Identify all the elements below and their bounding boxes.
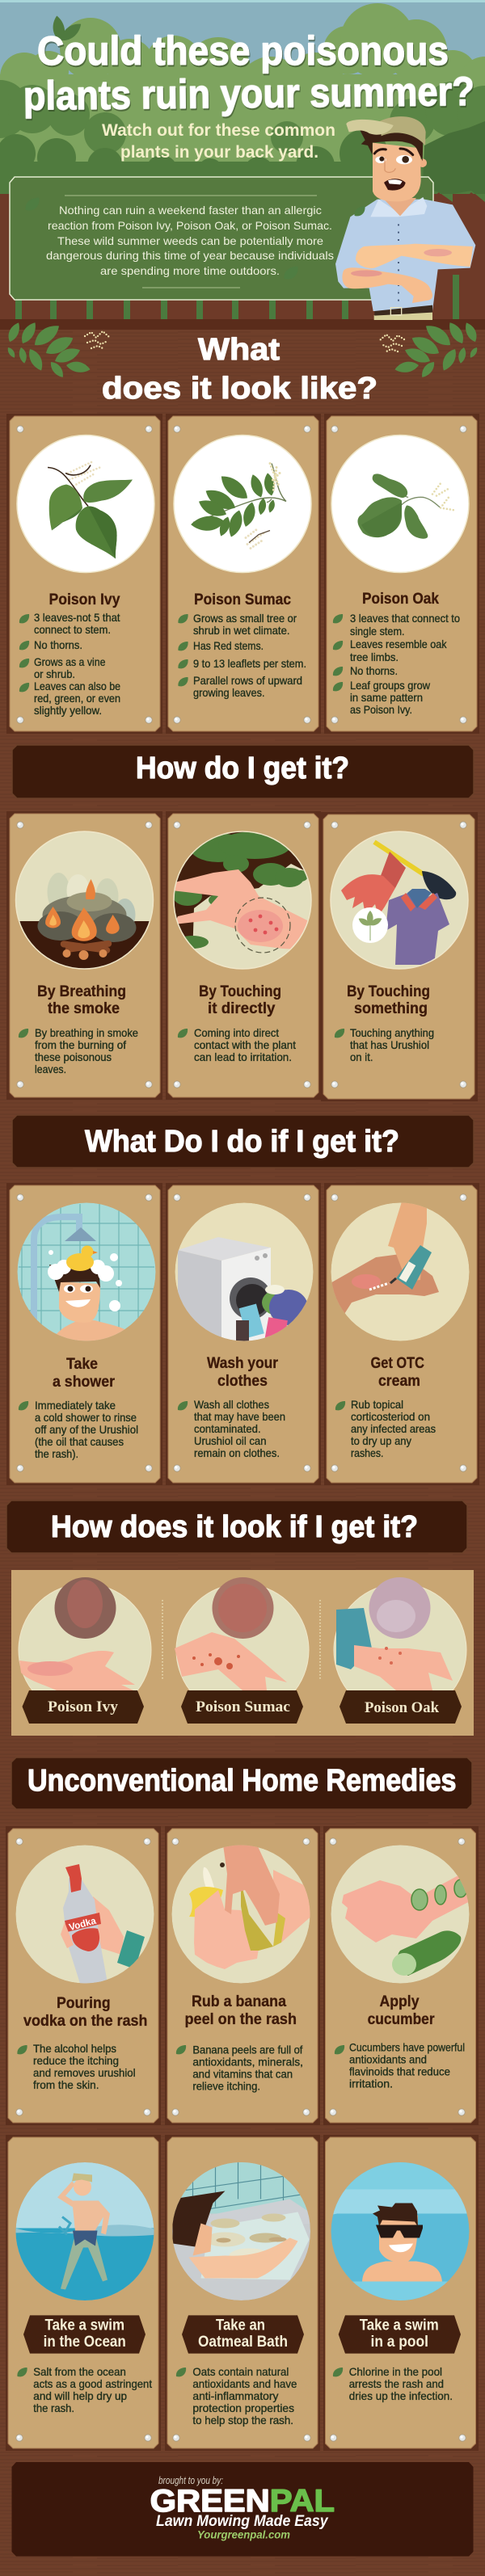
illustration: man in shower — [18, 1202, 155, 1353]
label — [181, 1690, 303, 1724]
icon: left leaf sprig — [6, 320, 109, 380]
bullet list: off any of the Urushiol — [35, 1423, 138, 1436]
bullet list: acts as a good astringent — [33, 2377, 152, 2390]
hero banner scene — [0, 0, 485, 330]
bullet list: connect to stem. — [34, 623, 111, 636]
bullet list: Grows as a vine — [34, 655, 106, 668]
title: something — [354, 1000, 428, 1017]
bullet list: red, green, or even — [34, 692, 120, 705]
icon: leaves at title — [51, 15, 84, 44]
title: Rub a banana — [192, 1993, 286, 2010]
title — [199, 983, 281, 1017]
bullet list: remain on clothes. — [194, 1446, 280, 1459]
label: Take an — [216, 2317, 265, 2334]
bullet list: Parallel rows of upward — [193, 674, 302, 687]
heading: what does it look like: What — [198, 333, 280, 367]
bullet list: these poisonous — [35, 1050, 112, 1063]
bullet list: contaminated. — [194, 1422, 261, 1435]
label: Oatmeal Bath — [198, 2334, 288, 2351]
card: otc cream — [324, 1183, 479, 1485]
title: Wash your — [207, 1355, 279, 1372]
card: take a shower — [6, 1183, 162, 1485]
label: in the Ocean — [44, 2334, 126, 2351]
heading bar: how do I get it: How do I get it? — [136, 751, 349, 785]
heading bar: what do I do: What Do I do if I get it? — [85, 1125, 399, 1159]
bullet list: antioxidants and have — [192, 2377, 297, 2390]
title — [347, 983, 430, 1017]
illustration: applying cream — [327, 1199, 469, 1341]
title: By Breathing — [37, 983, 126, 1000]
bullet list — [335, 1398, 436, 1459]
bullet list — [19, 1026, 138, 1075]
card: poison ivy — [6, 414, 162, 734]
card: poison sumac — [166, 414, 321, 734]
bullet list — [333, 612, 460, 716]
bullet list: a cold shower to rinse — [35, 1411, 137, 1424]
bullet list: leaves. — [35, 1063, 66, 1075]
panel: intro — [10, 177, 433, 300]
illustration: man swimming in ocean — [12, 2162, 158, 2305]
title — [53, 1356, 116, 1391]
bullet list: Rub topical — [351, 1398, 403, 1411]
bullet list: Leaf groups grow — [350, 679, 431, 692]
illustration: campfire — [16, 832, 153, 968]
title: Poison Oak — [362, 591, 439, 608]
illustration: vodka bottle — [16, 1846, 154, 1989]
intro text: are spending more time outdoors. — [100, 264, 280, 277]
bullet list: Urushiol oil can — [194, 1434, 267, 1447]
card: swim in the ocean — [6, 2135, 161, 2451]
intro text — [46, 204, 334, 277]
title — [23, 1995, 147, 2030]
bullet list: 3 leaves that connect to — [350, 612, 460, 625]
logo: GREENPAL — [150, 2484, 335, 2519]
bullet list: the rash). — [35, 1447, 78, 1460]
intro text: dangerous during this time of year because individuals — [46, 249, 334, 262]
title: cream — [378, 1373, 420, 1390]
bullet list — [19, 611, 120, 717]
title — [23, 28, 474, 119]
heading bar: what do I do — [12, 1115, 474, 1168]
rash: poison ivy — [19, 1577, 151, 1724]
url: Yourgreenpal.com — [197, 2528, 290, 2540]
title: By Touching — [347, 983, 430, 1000]
label: Poison Oak — [365, 1699, 439, 1716]
bullet list: Has Red stems. — [193, 639, 264, 652]
bullet list: Salt from the ocean — [33, 2365, 126, 2378]
bullet list: relieve itching. — [192, 2080, 260, 2093]
label: in a pool — [370, 2334, 428, 2351]
bullet list: arrests the rash and — [349, 2377, 444, 2390]
bullet list: flavinoids that reduce — [349, 2065, 450, 2078]
subtitle — [102, 121, 335, 162]
footer: brand — [11, 2462, 474, 2557]
title: Could these poisonous — [37, 28, 449, 74]
bullet list — [178, 1026, 296, 1063]
title: cucumber — [368, 2011, 435, 2028]
bullet list: and removes urushiol — [33, 2066, 136, 2079]
title: vodka on the rash — [23, 2013, 147, 2030]
bullet list: Chlorine in the pool — [349, 2365, 442, 2378]
bullet list: 9 to 13 leaflets per stem. — [193, 657, 306, 670]
bullet list: slightly yellow. — [34, 704, 102, 717]
bullet list: irritation. — [349, 2077, 393, 2090]
label — [23, 2315, 146, 2354]
illustration: poison oak leaves — [331, 435, 469, 573]
title: Pouring — [57, 1995, 111, 2012]
bullet list: Banana peels are full of — [192, 2043, 302, 2056]
bullet list: No thorns. — [34, 638, 82, 651]
bullet list: Grows as small tree or — [193, 612, 297, 625]
illustration: gloves shovel shirt — [330, 831, 469, 970]
bullet list — [335, 2041, 465, 2090]
heading: what does it look like — [102, 333, 377, 406]
bullet list: protection properties — [192, 2401, 294, 2414]
illustration: hand touching ivy — [170, 827, 315, 970]
bullet list: from the burning of — [35, 1038, 126, 1051]
card: cucumber — [323, 1826, 479, 2125]
title — [37, 983, 126, 1017]
card: banana — [165, 1826, 320, 2125]
illustration: poison ivy leaves — [16, 435, 155, 573]
bullet list: to dry up any — [351, 1434, 411, 1447]
bullet list: Oats contain natural — [192, 2365, 289, 2378]
bullet list: contact with the plant — [194, 1038, 296, 1051]
illustration: poison sumac leaves — [173, 435, 312, 573]
bullet list: that has Urushiol — [350, 1038, 429, 1051]
title: clothes — [217, 1373, 268, 1390]
bullet list: any infected areas — [351, 1422, 436, 1435]
bullet list: (the oil that causes — [35, 1435, 124, 1448]
bullet list: as Poison Ivy. — [350, 703, 412, 716]
bullet list — [176, 2365, 297, 2427]
bullet list: single stem. — [350, 625, 404, 638]
bullet list — [178, 612, 306, 699]
title: Poison Sumac — [194, 591, 291, 608]
bullet list: Touching anything — [350, 1026, 434, 1039]
card: touching something — [321, 812, 478, 1101]
bullet list: to help stop the rash. — [192, 2414, 293, 2427]
bullet list: or shrub. — [34, 667, 75, 680]
bullet list: tree limbs. — [350, 650, 399, 663]
card: vodka — [6, 1826, 161, 2125]
illustration: cucumber slices on hand — [331, 1846, 473, 1983]
bullet list: Immediately take — [35, 1399, 116, 1412]
bullet list: dries up the infection. — [349, 2389, 453, 2402]
intro text: reaction from Poison Ivy, Poison Oak, or Poison Sumac. — [48, 219, 332, 232]
bullet list: from the skin. — [33, 2078, 99, 2091]
bullet list — [176, 2043, 303, 2093]
heading bar: home remedies — [11, 1757, 472, 1809]
bullet list — [178, 1398, 285, 1459]
rash: poison oak — [334, 1577, 466, 1724]
title: it directly — [208, 1000, 276, 1017]
intro text: Nothing can ruin a weekend faster than an allergic — [59, 204, 322, 217]
icon: right leaf sprig — [380, 320, 479, 380]
bullet list: Wash all clothes — [194, 1398, 269, 1411]
label: Poison Ivy — [48, 1698, 119, 1715]
brought by: brought to you by: — [158, 2474, 223, 2486]
bullet list — [17, 2365, 152, 2414]
bullet list — [19, 1399, 138, 1460]
bullet list: can lead to irritation. — [194, 1050, 292, 1063]
bullet list: that may have been — [194, 1410, 285, 1423]
rash: poison sumac — [175, 1577, 309, 1724]
title — [368, 1993, 435, 2028]
bullet list: By breathing in smoke — [35, 1026, 138, 1039]
title: a shower — [53, 1374, 116, 1391]
illustration: banana peel on rash — [171, 1845, 314, 1983]
bullet list: antioxidants, minerals, — [192, 2056, 303, 2069]
bullet list: on it. — [350, 1050, 373, 1063]
title: peel on the rash — [184, 2011, 297, 2028]
bullet list — [335, 1026, 434, 1063]
bullet list: 3 leaves-not 5 that — [34, 611, 120, 624]
card: swim in a pool — [323, 2135, 479, 2451]
label: Take a swim — [45, 2317, 124, 2334]
title: the smoke — [48, 1000, 120, 1017]
card: poison oak — [324, 414, 479, 734]
bottle label text: Vodka — [68, 1915, 98, 1933]
heading bar: how does it look — [6, 1501, 467, 1553]
bullet list: growing leaves. — [193, 686, 265, 699]
bullet list: and vitamins that can — [192, 2067, 293, 2080]
title: Take — [66, 1356, 98, 1373]
heading bar: how do I get it — [12, 745, 474, 798]
illustration: washing machine — [175, 1202, 314, 1346]
bullet list: in same pattern — [350, 691, 423, 704]
panel: rash photos — [11, 1570, 474, 1736]
bullet list — [333, 2365, 453, 2402]
tagline: Lawn Mowing Made Easy — [156, 2513, 329, 2530]
title: Apply — [380, 1993, 420, 2010]
bullet list: No thorns. — [350, 664, 398, 677]
heading: what does it look like: does it look like? — [102, 372, 377, 406]
title — [207, 1355, 279, 1390]
title: By Touching — [199, 983, 281, 1000]
bullet list: Leaves can also be — [34, 680, 120, 692]
label: Poison Sumac — [196, 1698, 290, 1715]
card: touching directly — [166, 811, 321, 1100]
bullet list — [17, 2042, 136, 2091]
icon: itchy man — [335, 116, 475, 320]
title — [184, 1993, 297, 2028]
bullet list: and will help dry up — [33, 2389, 127, 2402]
label — [339, 2315, 461, 2354]
bullet list: The alcohol helps — [33, 2042, 116, 2055]
label: Take a swim — [360, 2317, 439, 2334]
illustration: man in pool with sunglasses — [327, 2159, 473, 2305]
bullet list: reduce the itching — [33, 2054, 119, 2067]
bullet list: Leaves resemble oak — [350, 638, 447, 650]
bullet list: corticosteriod on — [351, 1410, 430, 1423]
intro text: These wild summer weeds can be potentially more — [57, 234, 323, 247]
card: breathing smoke — [6, 811, 162, 1100]
label — [23, 1690, 144, 1724]
bullet list: antioxidants and — [349, 2053, 427, 2066]
title: Poison Ivy — [48, 591, 120, 608]
bullet list: the rash. — [33, 2401, 74, 2414]
bullet list: rashes. — [351, 1446, 383, 1459]
illustration: oatmeal bath — [168, 2159, 314, 2300]
card: oatmeal bath — [165, 2135, 320, 2451]
card: wash your clothes — [166, 1183, 321, 1485]
subtitle: plants in your back yard. — [120, 143, 318, 162]
bullet list: Cucumbers have powerful — [349, 2041, 465, 2054]
label — [340, 1690, 462, 1724]
subtitle: Watch out for these common — [102, 121, 335, 140]
bullet list: shrub in wet climate. — [193, 624, 289, 637]
title — [370, 1355, 424, 1390]
heading bar: how does it look: How does it look if I get it? — [51, 1510, 418, 1544]
bullet list: Coming into direct — [194, 1026, 279, 1039]
label — [182, 2315, 304, 2354]
bullet list: anti-inflammatory — [192, 2389, 278, 2402]
title: Get OTC — [370, 1355, 424, 1372]
